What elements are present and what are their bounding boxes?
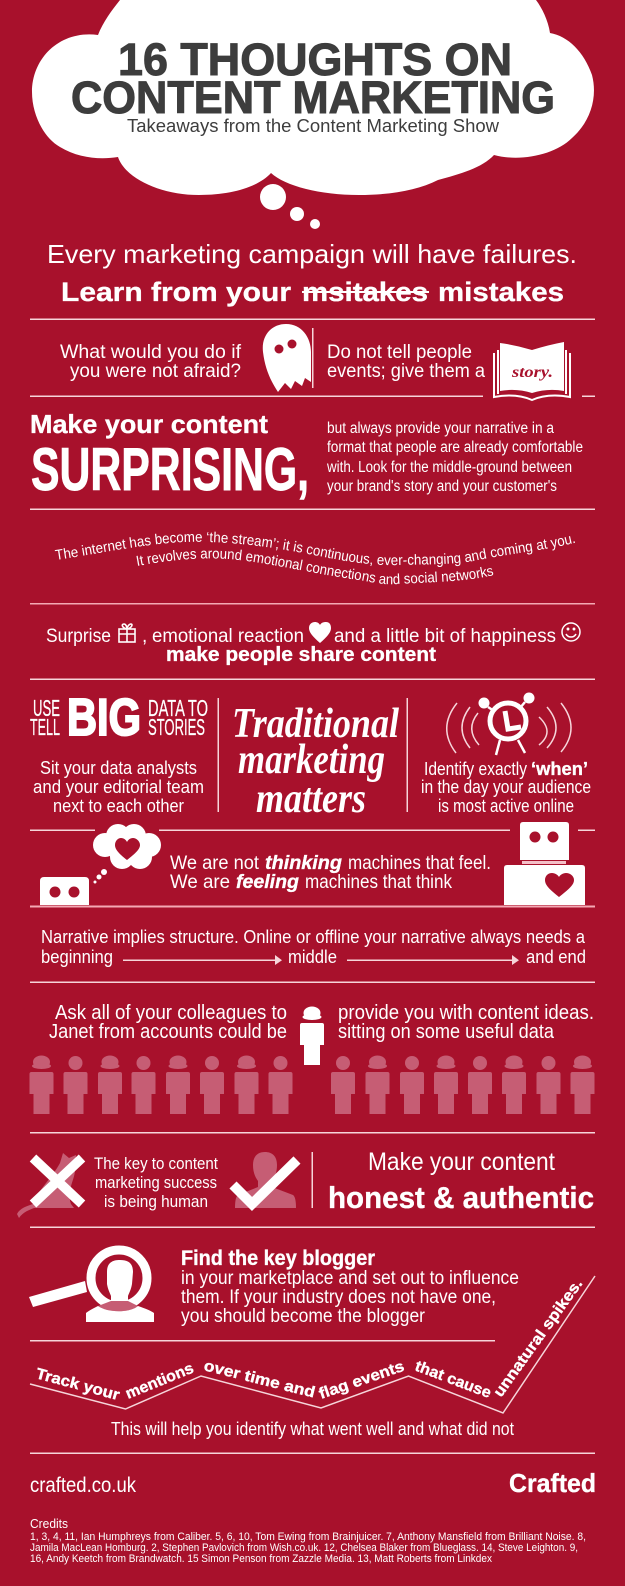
arrow: beginning to middle [123, 955, 282, 965]
icon: big robot [504, 822, 585, 905]
big data heading: BIG [67, 689, 141, 747]
icon: heart [309, 622, 331, 643]
big data heading [30, 689, 208, 747]
wavy stream text [54, 532, 575, 584]
credits: Jamila MacLean Homburg. 2, Stephen Pavlovich from Wish.co.uk. 12, Chelsea Blaker from Blueglass. 14, Steve Leighton. 9, [30, 1542, 578, 1554]
title [71, 34, 555, 123]
cloud shape [32, 0, 594, 195]
failures statement: Every marketing campaign will have failures. [47, 239, 577, 269]
honest and authentic text: Make your content [368, 1148, 555, 1176]
narrative paragraph: but always provide your narrative in a [327, 420, 554, 437]
icon: person with check [233, 1152, 297, 1208]
failures statement: mistakes [438, 277, 564, 307]
narrative structure text: middle [288, 947, 337, 967]
colleagues text: sitting on some useful data [338, 1021, 555, 1043]
narrative structure text [41, 927, 586, 967]
story text: events; give them a [327, 361, 485, 382]
afraid text: you were not afraid? [70, 361, 241, 382]
title: CONTENT MARKETING [71, 72, 555, 123]
key blogger text: them. If your industry does not have one, [181, 1287, 496, 1308]
machines text: feeling [236, 872, 299, 893]
narrative paragraph: format that people are already comfortable [327, 439, 583, 456]
machines text: We are [170, 872, 230, 893]
icon: smiley [562, 623, 580, 641]
big data text: Sit your data analysts [40, 758, 197, 778]
credits: Credits [30, 1517, 68, 1531]
failures statement: msitakes [302, 277, 428, 307]
when audience text: in the day your audience [421, 777, 591, 797]
key blogger text: you should become the blogger [181, 1306, 426, 1327]
machines text: thinking [265, 853, 342, 874]
key blogger text [181, 1247, 519, 1327]
when audience text: is most active online [438, 796, 574, 816]
narrative structure text: Narrative implies structure. Online or offline your narrative always needs a [41, 927, 586, 947]
mentions trend line [30, 1276, 596, 1414]
narrative paragraph: your brand's story and your customer's [327, 478, 557, 495]
big data heading: STORIES [148, 714, 205, 740]
crowd of colleagues [30, 1056, 594, 1114]
footer url: crafted.co.uk [30, 1474, 136, 1497]
machines text [170, 853, 491, 893]
failures statement [47, 239, 577, 307]
narrative paragraph: with. Look for the middle-ground between [326, 459, 572, 476]
traditional marketing script [232, 701, 399, 822]
when audience text: Identify exactly [424, 759, 527, 779]
make content surprising headline: SURPRISING, [31, 436, 309, 503]
mentions trend line: Track your [37, 1368, 120, 1400]
wavy stream text: It revolves around emotional connections and social networks [136, 550, 494, 584]
title: 16 THOUGHTS ON [118, 34, 512, 85]
colleagues text: Janet from accounts could be [49, 1021, 287, 1043]
icon: cat with cross [17, 1153, 82, 1218]
big data text: and your editorial team [33, 777, 204, 797]
credits [30, 1517, 586, 1565]
icon: ghost [263, 324, 311, 392]
credits: 16, Andy Keetch from Brandwatch. 15 Simon Penson from Zazzle Media. 13, Matt Roberts from Linkdex [30, 1553, 492, 1565]
share content statement: emotional reaction [152, 626, 304, 647]
cloud title block [32, 0, 594, 229]
when audience text: ‘when’ [531, 759, 588, 779]
narrative structure text: beginning [41, 947, 113, 967]
honest and authentic text [328, 1148, 594, 1215]
icon: story book [494, 342, 570, 400]
honest and authentic text: honest & authentic [328, 1180, 594, 1215]
story text [327, 342, 485, 382]
icon: story book: story. [511, 364, 553, 381]
afraid text: What would you do if [60, 342, 242, 363]
afraid text [60, 342, 242, 382]
share content statement: , [142, 626, 147, 647]
key blogger text: in your marketplace and set out to influence [181, 1268, 519, 1289]
big data heading: TELL [30, 714, 60, 740]
being human text [94, 1154, 218, 1211]
mentions trend line: mentions [126, 1365, 194, 1399]
share content statement: and a little bit of happiness [334, 626, 556, 647]
machines text: We are not [170, 853, 260, 874]
big data text: next to each other [53, 796, 184, 816]
colleagues text [49, 1002, 594, 1043]
credits: 1, 3, 4, 11, Ian Humphreys from Caliber. 5, 6, 10, Tom Ewing from Brainjuicer. 7, Anthony Mansfield from Brilliant Noise. 8, [30, 1531, 586, 1543]
traditional marketing script: marketing [238, 737, 385, 783]
mentions trend line: unnatural spikes. [494, 1282, 583, 1396]
logo: Crafted: Crafted [509, 1468, 596, 1498]
share content statement: make people share content [166, 644, 436, 666]
narrative paragraph [326, 420, 583, 495]
wavy stream text: The internet has become ‘the stream’; it is continuous, ever-changing and coming at you. [54, 532, 575, 567]
mentions trend line: that cause [416, 1361, 490, 1398]
machines text: machines that feel. [348, 853, 491, 874]
icon: gift [119, 624, 135, 642]
big data heading: USE [33, 695, 60, 721]
traditional marketing script: matters [256, 776, 366, 822]
colleagues text: provide you with content ideas. [338, 1002, 594, 1024]
traditional marketing script: Traditional [232, 701, 399, 747]
story text: Do not tell people [327, 342, 472, 363]
icon: Janet highlighted person [300, 1006, 324, 1065]
colleagues text: Ask all of your colleagues to [55, 1002, 287, 1024]
when audience text [421, 759, 591, 816]
make content surprising headline [30, 409, 309, 503]
arrow: middle to end [347, 955, 519, 965]
being human text: is being human [104, 1192, 208, 1211]
thought bubbles [260, 184, 320, 229]
big data heading: DATA TO [148, 695, 208, 721]
subtitle: Takeaways from the Content Marketing Show [127, 116, 500, 136]
mentions trend line: over time and [204, 1362, 316, 1398]
being human text: marketing success [95, 1173, 217, 1192]
share content statement [46, 622, 580, 666]
icon: alarm clock [447, 692, 571, 755]
machines text: machines that think [305, 872, 452, 893]
failures statement: Learn from your [61, 277, 292, 307]
share content statement: Surprise [46, 626, 111, 647]
being human text: The key to content [94, 1154, 218, 1173]
make content surprising headline: Make your content [30, 409, 268, 439]
help identify text: This will help you identify what went well and what did not [111, 1419, 514, 1439]
narrative structure text: and end [526, 947, 586, 967]
big data text [33, 758, 204, 816]
icon: small robot with thought [40, 824, 161, 905]
icon: magnifier over blogger [29, 1250, 154, 1322]
mentions trend line: flag events [318, 1363, 404, 1399]
key blogger text: Find the key blogger [181, 1247, 375, 1270]
